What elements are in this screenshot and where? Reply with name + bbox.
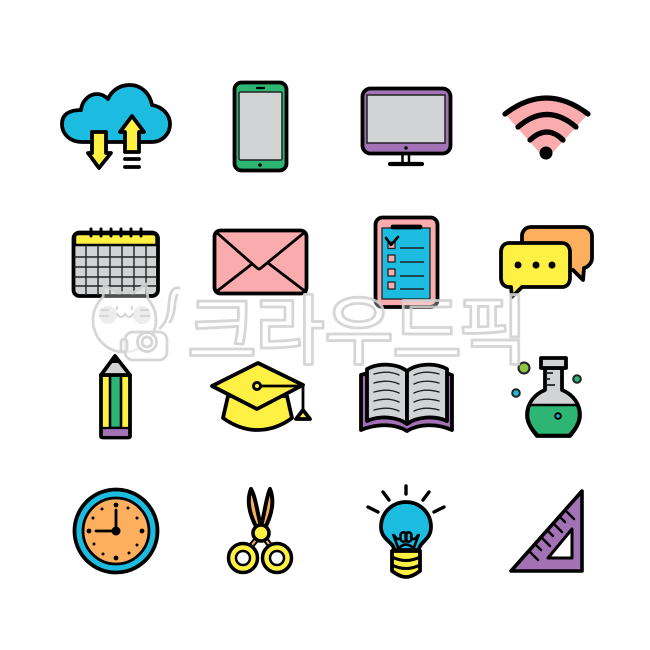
icon: chat bubbles [501,227,592,297]
icon: open book [361,365,452,431]
book pages [367,365,407,424]
speaker and button [257,87,264,89]
flask liquid [528,405,579,435]
clock ring [74,490,158,572]
triangle cutout [548,529,572,558]
icon: wifi [505,97,588,160]
scissor blades [249,489,261,530]
icon: light bulb [368,486,444,577]
calendar body [74,232,158,296]
cap board [212,363,303,409]
icon: envelope [214,230,306,294]
triangle ruler [511,491,582,571]
scissor pivot [253,525,269,541]
calendar header [75,234,156,245]
envelope folds [216,232,306,292]
icon: smartphone [234,82,286,170]
power dot [404,146,408,150]
yellow bubble [501,243,570,297]
calendar grid [74,245,157,295]
book text lines [374,372,439,411]
download arrow [88,132,111,168]
icon: set square [511,491,582,571]
calendar rings [91,229,141,236]
envelope body [214,230,306,294]
clipboard body [376,218,438,307]
scissor arms [247,540,274,551]
monitor screen [367,95,445,143]
icon: calendar [74,229,158,296]
signal arcs [505,98,588,140]
check boxes [388,242,395,289]
phone screen [239,92,282,160]
watermark [93,284,528,375]
watermark: cat face [100,307,149,317]
icon: flask [512,358,581,436]
icon: scissors [232,489,288,569]
orange bubble [522,227,592,280]
pencil body [101,375,130,438]
monitor body [362,88,450,154]
clock hands [96,510,116,531]
flask glass [527,368,580,436]
clip [393,225,420,229]
flask ticks [546,373,555,385]
pencil stripe [110,375,121,428]
upload arrow [120,116,144,152]
monitor stand [402,155,409,163]
icon: pencil [101,355,130,438]
cloud body [62,85,170,142]
rays [368,486,444,512]
icon: graduation cap [212,363,310,430]
bulb base [392,551,420,577]
check mark [386,237,398,245]
ruler ticks [530,503,574,560]
icon: wall clock [74,490,158,572]
watermark: cat cheeks [99,306,151,324]
cap button and cord [254,382,260,390]
watermark: brand name: 크라우드픽 [187,290,528,375]
watermark: cat tail strap [160,288,179,328]
scissor handles [232,547,254,569]
clipboard sheet [382,228,430,299]
bulb glass [381,502,431,550]
bubbles [555,413,561,419]
watermark: camera [121,332,167,360]
icon: cloud transfer [62,85,170,168]
dots [514,262,556,268]
signal sector [505,97,588,160]
cap base [223,396,292,430]
icon: clipboard checklist [376,218,438,307]
pencil tip [101,356,130,375]
tassel [296,410,310,419]
filament [393,532,419,550]
hour marks [87,503,144,560]
icon: desktop monitor [362,88,450,164]
list lines [400,248,424,289]
book cover [361,373,452,431]
flask cap [541,358,566,368]
phone body [234,82,286,170]
signal dot [540,146,552,160]
clock face [83,498,149,564]
lines [125,159,139,167]
pencil eraser [103,429,128,436]
watermark: cat head [93,284,156,352]
